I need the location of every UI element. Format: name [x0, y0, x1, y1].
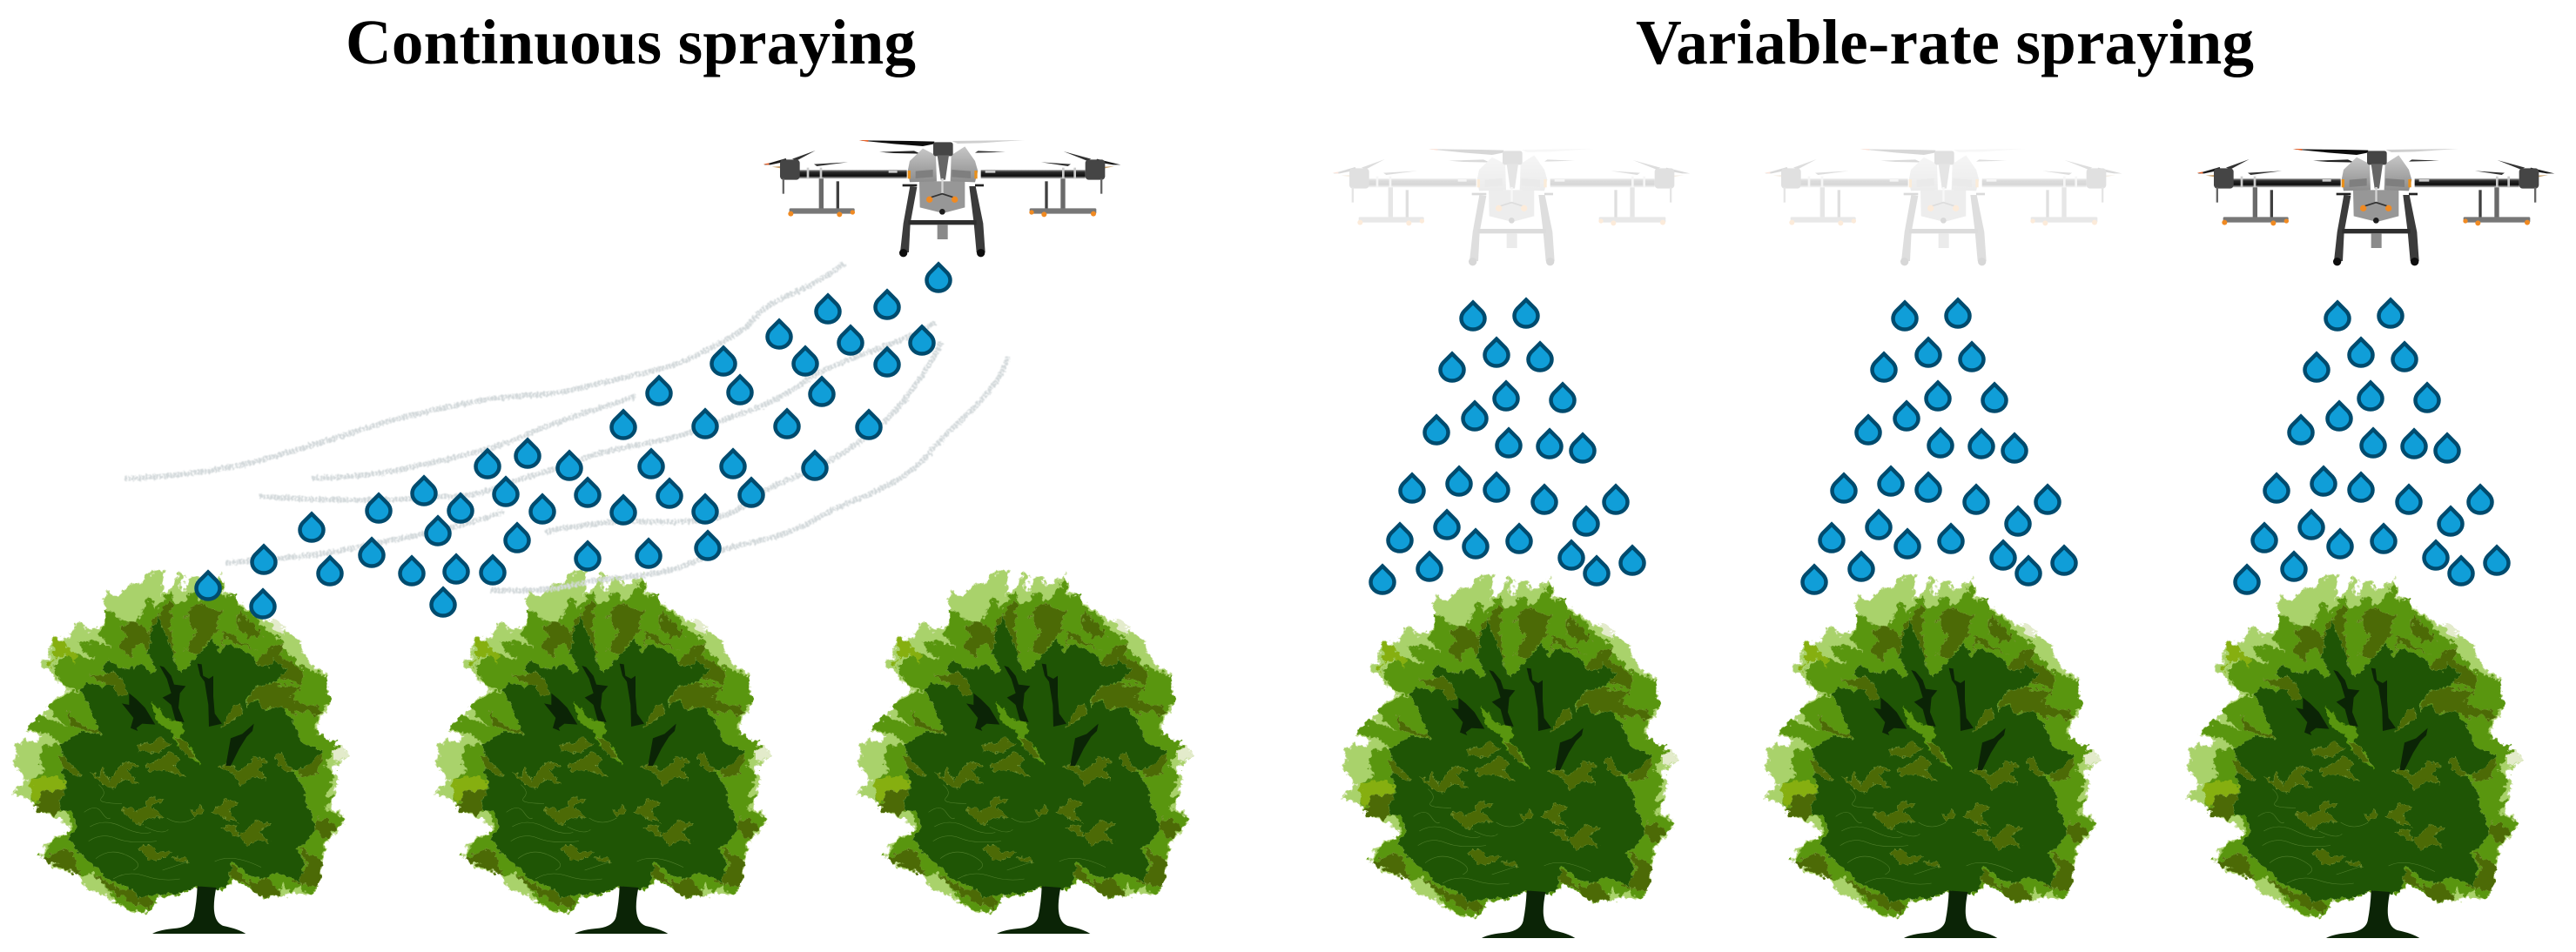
drone: active variable-rate sprayer — [2197, 149, 2554, 265]
drone: inactive 1 — [1333, 149, 1690, 265]
title: Variable-rate spraying: Variable-rate spraying — [1636, 7, 2254, 77]
spray motion lines — [124, 264, 1008, 591]
droplets: variable-rate group 3 — [2236, 299, 2509, 593]
title: Continuous spraying: Continuous spraying — [346, 7, 916, 77]
droplets: variable-rate group 1 — [1370, 299, 1644, 593]
trees: variable-rate row — [1341, 574, 2524, 938]
droplets: variable-rate group 2 — [1802, 299, 2075, 593]
drone: continuous sprayer — [763, 140, 1120, 257]
droplets: continuous spray — [197, 265, 951, 618]
trees: continuous row — [11, 570, 1194, 934]
drone: inactive 2 — [1765, 149, 2122, 265]
